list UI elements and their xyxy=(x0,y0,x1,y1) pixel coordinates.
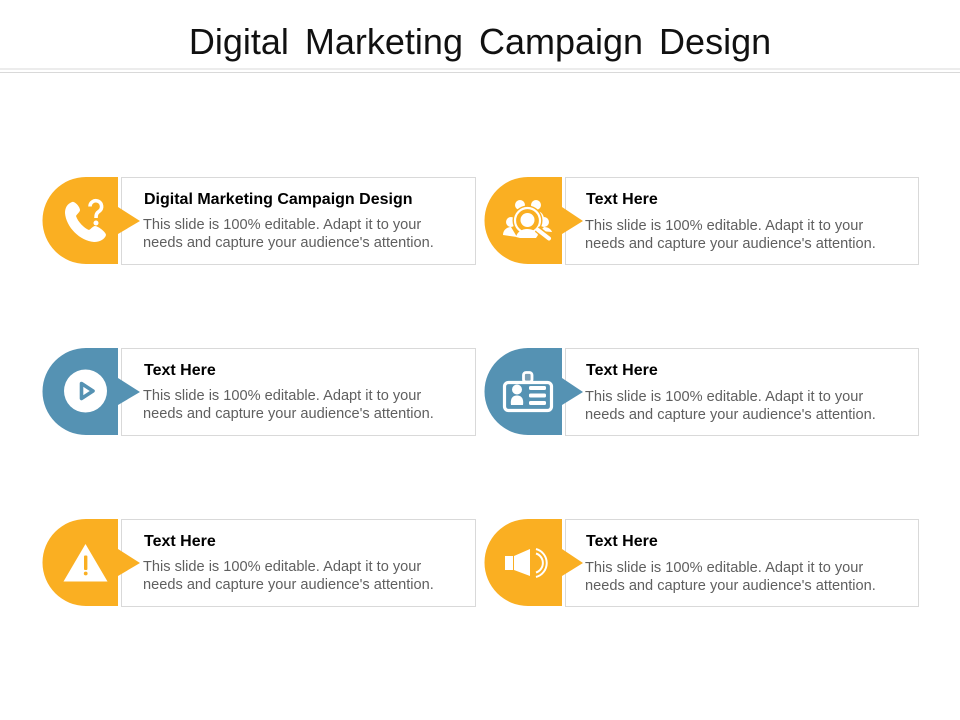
text box xyxy=(566,520,918,606)
panel: row 3 right xyxy=(484,519,918,606)
body text: This slide is 100% editable. Adapt it to your xyxy=(143,388,421,404)
badge xyxy=(42,177,140,264)
panel: row 1 left xyxy=(42,177,475,264)
badge xyxy=(42,519,140,606)
heading: Text Here xyxy=(144,533,216,550)
badge xyxy=(484,519,583,606)
body text: needs and capture your audience's attention. xyxy=(585,236,876,252)
body text: This slide is 100% editable. Adapt it to your xyxy=(585,560,863,576)
badge xyxy=(42,348,140,435)
badge xyxy=(484,177,583,264)
panel: row 3 left xyxy=(42,519,475,606)
body text: needs and capture your audience's attention. xyxy=(143,406,434,422)
heading: Text Here xyxy=(144,362,216,379)
body text: needs and capture your audience's attention. xyxy=(585,578,876,594)
body text: This slide is 100% editable. Adapt it to your xyxy=(585,389,863,405)
text box xyxy=(122,348,476,436)
body text: This slide is 100% editable. Adapt it to your xyxy=(585,218,863,234)
body text: needs and capture your audience's attention. xyxy=(143,235,434,251)
icon: megaphone speaker xyxy=(505,549,547,577)
panel: row 2 left xyxy=(42,348,475,436)
text box xyxy=(122,178,476,264)
icon: phone with question mark xyxy=(65,201,106,242)
text box xyxy=(566,178,918,264)
title: Digital Marketing Campaign Design xyxy=(189,21,771,62)
panel: row 2 right xyxy=(484,348,918,436)
heading: Digital Marketing Campaign Design xyxy=(144,191,412,208)
text box xyxy=(122,520,476,606)
body text: This slide is 100% editable. Adapt it to your xyxy=(143,559,421,575)
icon: people with magnifier xyxy=(503,200,552,238)
heading: Text Here xyxy=(586,362,658,379)
body text: needs and capture your audience's attention. xyxy=(585,407,876,423)
panel: row 1 right xyxy=(484,177,918,264)
heading: Text Here xyxy=(586,533,658,550)
badge xyxy=(484,348,583,435)
heading: Text Here xyxy=(586,191,658,208)
icon: play button xyxy=(64,370,107,412)
text box xyxy=(566,348,918,436)
icon: warning triangle xyxy=(64,544,108,582)
body text: This slide is 100% editable. Adapt it to your xyxy=(143,217,421,233)
icon: ID badge xyxy=(504,372,552,410)
body text: needs and capture your audience's attention. xyxy=(143,577,434,593)
